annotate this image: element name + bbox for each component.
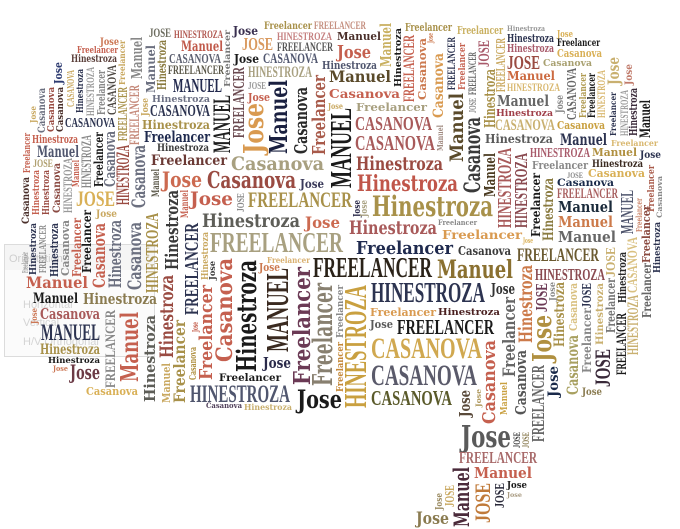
word group: centre: Casanova (291, 87, 312, 154)
word group: centre: FREELANCER (314, 18, 366, 32)
word group: right lobe: Casanova (460, 117, 486, 193)
word group: left lobe: Freelancer (144, 129, 210, 146)
word group: left lobe: HINESTROZA (113, 145, 134, 205)
word group: right lobe: Freelancer (611, 138, 659, 148)
word group: left lobe: Casanova (40, 306, 100, 323)
word group: left lobe: Hinestroza (142, 117, 210, 132)
word group: centre: Casanova (231, 153, 324, 175)
word group: centre: Freelancer (356, 100, 428, 114)
word group: centre: Hinestroza (244, 402, 292, 412)
word group: left lobe: JOSE (33, 156, 53, 170)
word group: left lobe: Hinestroza (162, 190, 183, 270)
word group: left lobe: Casanova (90, 223, 110, 288)
word group: right lobe: Freelancer (608, 91, 618, 136)
word group: right lobe: Jose (604, 57, 623, 86)
word group: right lobe: HINESTROZA (494, 148, 516, 228)
word group: left lobe: Casanova (59, 220, 72, 276)
word group: centre: Casanova (431, 53, 447, 118)
word group: centre: Freelancer (309, 75, 330, 155)
word group: right lobe: Manuel (638, 100, 654, 138)
word group: centre: Jose (360, 200, 370, 218)
word group: left lobe: CASANOVA (65, 116, 116, 131)
word group: centre: Manuel (437, 255, 513, 284)
word group: right lobe: JOSE (468, 98, 479, 113)
word group: right lobe: Jose (547, 282, 557, 302)
word group: centre: Jose (247, 91, 270, 104)
word group: centre: Hinestroza (322, 58, 377, 72)
word group: left lobe: Hinestroza (83, 290, 157, 308)
word group: centre: Manuel (329, 67, 391, 86)
word group: right lobe: Manuel (497, 93, 549, 110)
word group: right lobe: Jose (556, 30, 573, 40)
word group: centre: Freelancer (405, 21, 452, 34)
word group: centre: Casanova (206, 401, 242, 410)
word group: left lobe: HINESTROZA (142, 213, 162, 293)
word group: centre: HINESTROZA (190, 381, 290, 408)
word group: centre: Jose (353, 200, 363, 218)
word group: right lobe: Hinestroza (541, 178, 557, 241)
word group: right lobe: Freelancer (529, 172, 543, 237)
word group: speech bubble tail: Jose (459, 420, 511, 455)
faint background options panel: Horizontal (23, 299, 73, 311)
word group: centre: Hinestroza (438, 308, 500, 318)
word group: left lobe: Manuel (72, 160, 82, 187)
word group: right lobe: Manuel (481, 153, 499, 197)
word group: left lobe: FREELANCER (168, 62, 224, 77)
word group: right lobe: Hinestroza (515, 265, 537, 343)
word group: right lobe: JOSE (507, 52, 540, 74)
word group: centre: JOSE (248, 80, 266, 92)
word group: left lobe: Casanova (52, 163, 63, 213)
word group: right lobe: Hinestroza (653, 222, 663, 273)
word group: centre: Jose (327, 101, 343, 111)
word group: centre: Hinestroza (202, 210, 300, 232)
word group: left lobe: HINESTROZA (83, 67, 97, 116)
word group: centre: Manuel (337, 29, 382, 43)
word group: right lobe: Hinestroza (552, 282, 568, 347)
word group: centre: Manuel (377, 23, 395, 67)
word group: left lobe: Jose (190, 322, 200, 333)
word group: centre: Manuel (446, 93, 468, 162)
word group: centre: CASANOVA (355, 113, 432, 135)
word group: left lobe: Hinestroza (40, 342, 100, 358)
word group: speech bubble tail: Manuel (474, 465, 532, 482)
word group: right lobe: JOSE (604, 247, 619, 277)
word group: centre: Jose (490, 281, 515, 298)
word group: speech bubble tail: FREELANCER (528, 364, 548, 442)
word group: left lobe: Casanova (124, 222, 146, 290)
word group: right lobe: FREELANCER (465, 52, 479, 95)
word group: left lobe: Freelancer (70, 217, 84, 277)
word group: right lobe: CASANOVA (565, 67, 580, 120)
word group: left lobe: FREELANCER (38, 224, 49, 273)
word group: left lobe: CASANOVA (104, 65, 119, 115)
word group: right lobe: Freelancer (532, 159, 588, 172)
word group: right lobe: HINESTROZA (530, 146, 591, 161)
word group: centre: Freelancer (336, 285, 346, 338)
word group: right lobe: JOSE (567, 171, 583, 180)
word group: centre: FREELANCER (277, 39, 333, 54)
word group: speech bubble tail: JOSE (493, 483, 508, 508)
word group: speech bubble tail: Manuel (500, 382, 510, 415)
word group: left lobe: Jose (95, 209, 117, 220)
word group: left lobe: Manuel (33, 291, 78, 307)
word group: speech bubble tail: Jose (474, 388, 483, 408)
word group: right lobe: Casanova (655, 175, 664, 218)
word group: centre (188, 18, 533, 414)
word group: centre: HINESTROZA (337, 285, 373, 408)
word group: centre: Hinestroza (356, 153, 443, 175)
word group: left lobe: FREELANCER (181, 223, 203, 315)
word group: centre: Jose (303, 213, 340, 232)
word group: right lobe: Hinestroza (507, 24, 545, 33)
word group: centre: Hinestroza (357, 171, 458, 197)
word group: right lobe: HINESTROZA (625, 295, 642, 355)
word group: centre: FREELANCER (248, 187, 353, 212)
word group: centre: CASANOVA (263, 51, 318, 67)
word group: left lobe: Freelancer (79, 210, 94, 273)
word group: left lobe: JOSE (76, 186, 115, 211)
word group: right lobe: Freelancer (579, 308, 594, 373)
word group: centre: FREELANCER (210, 228, 344, 259)
word group: centre: FREELANCER (313, 252, 433, 284)
word group: left lobe: Casanova (56, 87, 66, 132)
word group: left lobe: Hinestroza (48, 223, 61, 277)
word group: speech bubble tail: FREELANCER (459, 448, 537, 467)
word group: left lobe: Casanova (21, 177, 32, 224)
word group: left lobe: Manuel (181, 39, 223, 55)
word group: centre: FREELANCER (229, 67, 248, 138)
word group: right lobe: Hinestroza (595, 282, 606, 345)
word group: centre: Jose (232, 23, 258, 38)
word group: left lobe: MANUEL (41, 320, 100, 345)
word group: speech bubble tail: JOSE (521, 432, 531, 448)
word group: centre: Casanova (415, 37, 429, 100)
word group: left lobe: Casanova (37, 88, 48, 133)
word group: right lobe: Jose (624, 64, 635, 86)
word group: left lobe: Hinestroza (201, 232, 211, 280)
word group: left lobe: MANUEL (173, 75, 222, 97)
word group: right lobe: CASANOVA (625, 237, 641, 293)
word group: left lobe: Jose (52, 62, 65, 85)
word group: left lobe: Hinestroza (154, 40, 169, 90)
word group: right lobe: Manuel (560, 130, 607, 149)
word group: centre: Jose (335, 42, 371, 63)
word group: left lobe: Freelancer (117, 39, 127, 85)
word group: left lobe: Jose (99, 37, 119, 48)
word group: right lobe: Jose (639, 150, 661, 161)
word group: left lobe: FREELANCER (127, 85, 143, 145)
word group: right lobe: Freelancer (647, 165, 657, 212)
word group: left lobe: Casanova (128, 145, 150, 208)
word group: left lobe: Manuel (143, 45, 158, 93)
word group: centre: Freelancer (267, 255, 311, 265)
word group: right lobe: Casanova (563, 335, 582, 395)
word group: left lobe: Freelancer (91, 132, 106, 187)
word group: right lobe: Manuel (558, 198, 613, 216)
word group: left lobe: Freelancer (170, 320, 189, 403)
word group: centre: MANUEL (323, 108, 358, 188)
faint background options panel: H/V Orthogonal (23, 336, 99, 348)
word group: centre: JOSE (242, 34, 273, 54)
word group: right lobe: JOSE (590, 349, 615, 387)
word group: right lobe: Hinestroza (507, 32, 554, 45)
word group: left lobe: FREELANCER (116, 87, 131, 141)
word group: left lobe: HINESTROZA (60, 158, 75, 213)
word group: speech bubble tail: Manuel (449, 467, 474, 527)
word group: centre: CASANOVA (355, 131, 436, 155)
word group: right lobe: FREELANCER (557, 186, 618, 202)
word group: centre: Casanova (458, 243, 511, 258)
word group: centre: Manuel (264, 80, 293, 154)
word group: right lobe: Freelancer (457, 24, 503, 37)
word group: centre: Jose (299, 176, 324, 191)
word group: right lobe: Freelancer (500, 296, 520, 377)
word group: right lobe: Freelancer (640, 262, 654, 318)
word group: left lobe: Hinestroza (157, 143, 209, 154)
word group: right lobe: JOSE (532, 283, 551, 312)
word group: left lobe: Casanova (101, 131, 119, 187)
word group: left lobe: Manuel (180, 190, 191, 218)
word group: right lobe: CASANOVA (495, 117, 555, 134)
word group: speech bubble tail: Jose (506, 481, 527, 491)
word group: centre: Jose (295, 385, 342, 414)
word group: left lobe: Manuel (115, 312, 144, 382)
word group: centre: CASANOVA (371, 332, 482, 365)
word group: right lobe (457, 24, 664, 398)
word group: left lobe: CASANOVA (65, 70, 77, 107)
word group: centre: MANUEL (259, 268, 295, 352)
word group: right lobe: Freelancer (579, 73, 589, 118)
word group: right lobe: JOSE (476, 40, 493, 67)
word group: right lobe: HINESTROZA (594, 70, 608, 118)
word group: centre: Casanova (329, 86, 400, 101)
word group: speech bubble tail: Casanova (479, 340, 500, 424)
word group: centre: HINESTROZA (371, 278, 485, 309)
word group: right lobe: HINESTROZA (511, 153, 531, 228)
word group: speech bubble tail: Jose (435, 493, 445, 511)
word group: right lobe: Manuel (507, 68, 555, 83)
word group: centre: Freelancer (264, 21, 313, 32)
word group: centre: Jose (261, 355, 291, 372)
word group: right lobe: Hinestroza (485, 131, 553, 146)
word group: right lobe: Freelancer (557, 38, 601, 49)
word group: centre: Jose (239, 103, 270, 156)
word group: left lobe: FREELANCER (103, 310, 119, 388)
word group: centre: Freelancer (336, 342, 346, 392)
word group: centre: Jose (369, 318, 393, 331)
word group: left lobe: Freelancer (95, 70, 108, 115)
word group: right lobe: Manuel (558, 229, 616, 246)
word group: centre: Jose (522, 236, 533, 245)
word group: centre: Freelancer (308, 283, 339, 386)
word group: right lobe: Casanova (557, 178, 615, 189)
word group: left lobe: Jose (160, 167, 202, 192)
word group: centre: MANUEL (209, 95, 236, 153)
word group: left lobe: Hinestroza (71, 54, 117, 65)
word group: right lobe: Casanova (557, 119, 605, 132)
word group: left lobe: JOSE (149, 25, 171, 40)
word group: right lobe: Casanova (567, 283, 580, 331)
word group: left lobe: Freelancer (23, 133, 33, 173)
word group: right lobe: Hinestroza (507, 42, 554, 55)
word group: right lobe: Casanova (588, 167, 645, 180)
word group: right lobe: HINESTROZA (617, 90, 631, 136)
word group: left lobe: CASANOVA (169, 52, 222, 67)
word group: left lobe: Hinestroza (156, 275, 178, 358)
word group: centre: JOSE (236, 193, 247, 212)
word group: centre: Jose (426, 33, 435, 44)
word group: right lobe: Hinestroza (627, 88, 640, 136)
word group: left lobe: Jose (52, 364, 68, 373)
word group: left lobe: Manuel (151, 169, 162, 197)
faint background options panel (4, 244, 154, 356)
word group: right lobe: FREELANCER (517, 245, 599, 266)
word group: left lobe: Casanova (207, 166, 296, 194)
word group: centre: Jose (188, 188, 233, 210)
word group: left lobe: Hinestroza (48, 355, 100, 365)
word group: right lobe: Hinestroza (496, 109, 553, 119)
word group: speech bubble tail: JOSE (443, 485, 458, 507)
word group: left lobe: Freelancer (196, 285, 217, 380)
word group: left lobe: Hinestroza (29, 223, 39, 275)
word group: left lobe: Casanova (86, 385, 138, 398)
word group: left lobe: Casanova (189, 347, 199, 380)
word group: speech bubble tail: Casanova (513, 349, 530, 415)
word group: speech bubble tail: Jose (414, 509, 449, 529)
word group: centre: Freelancer (438, 218, 477, 227)
word group: left lobe: Hinestroza (76, 69, 86, 113)
word group: left lobe: Freelancer (77, 46, 118, 56)
word group: left lobe: Manuel (37, 142, 79, 161)
word group: centre: Hinestroza (232, 260, 263, 372)
word group: left lobe: Hinestroza (32, 133, 78, 146)
word group: left lobe: Hinestroza (32, 170, 42, 215)
word group: centre: Hinestroza (394, 28, 404, 87)
word group: centre: Freelancer (288, 266, 316, 385)
word group: right lobe: HINESTROZA (507, 80, 560, 94)
word group: left lobe: HINESTROZA (79, 135, 95, 188)
word group: centre: FREELANCER (397, 315, 495, 339)
word group: right lobe: HINESTROZA (535, 265, 605, 284)
word group: left lobe: Jose (207, 261, 217, 281)
word group: left lobe (20, 25, 296, 403)
word group: right lobe: Hinestroza (616, 252, 629, 303)
word group: speech bubble tail (414, 340, 562, 529)
word group: centre: Freelancer (219, 373, 282, 384)
word group: speech bubble tail: JOSE (512, 432, 522, 448)
word group: left lobe: Jose (28, 106, 38, 124)
word group: centre: CASANOVA (371, 386, 453, 410)
word group: left lobe: Jose (69, 360, 100, 384)
word group: right lobe: Freelancer (458, 43, 468, 90)
word group: speech bubble tail: Jose (546, 366, 562, 398)
word group: right lobe: FREELANCER (614, 313, 630, 375)
word group: right lobe: Freelancer (604, 277, 618, 333)
word group: left lobe: Manuel (26, 273, 88, 292)
word group: left lobe: Casanova (212, 258, 238, 362)
word group: right lobe: Casanova (557, 47, 602, 60)
word group: left lobe: Freelancer (151, 153, 228, 169)
word group: right lobe: Freelancer (640, 205, 653, 263)
word group: left lobe: Jose (29, 308, 39, 325)
word group: left lobe: Freelancer (20, 252, 30, 273)
faint background options panel: Orientation (9, 253, 63, 265)
word group: right lobe: Jose (555, 95, 566, 114)
word group: centre: Freelancer (222, 29, 232, 87)
faint background options panel: Vertical (23, 317, 59, 329)
word group: centre: HINESTROZA (277, 29, 332, 43)
word group: centre: Hinestroza (372, 190, 493, 223)
word group: speech bubble tail: Jose (506, 491, 522, 499)
word group: left lobe: Manuel (160, 363, 173, 403)
word group: centre: Hinestroza (349, 217, 437, 239)
word group: centre: FREELANCER (444, 37, 458, 90)
word group: right lobe: Manuel (592, 146, 637, 159)
word group: left lobe: CASANOVA (150, 101, 210, 120)
word group: right lobe: Freelancer (634, 197, 644, 232)
word group: right lobe: Jose (581, 387, 602, 398)
word group: left lobe: Hinestroza (141, 315, 159, 402)
word group: left lobe: Jose (141, 98, 151, 117)
word group: centre: CASANOVA (371, 359, 477, 392)
word group: speech bubble tail: JOSE (470, 483, 495, 523)
word group: right lobe: Manuel (558, 214, 613, 231)
word group: right lobe: Jose (528, 315, 558, 364)
word group: right lobe: Casanova (543, 59, 592, 69)
word group: centre: Jose (258, 261, 280, 274)
word group: centre: Freelancer (442, 227, 522, 242)
word group: centre: Freelancer (356, 238, 453, 259)
word group: left lobe: Manuel (129, 37, 146, 79)
word group: right lobe: Freelancer (587, 72, 598, 118)
word group: left lobe: HINESTROZA (174, 27, 223, 41)
word group: centre: Jose (233, 51, 259, 66)
word group: right lobe: Hinestroza (482, 69, 499, 128)
word group: right lobe: JOSE (580, 283, 595, 308)
word group: centre: HINESTROZA (248, 64, 312, 81)
word group: centre: Freelancer (370, 305, 437, 319)
word group: left lobe: Hinestroza (152, 95, 210, 105)
word group: speech bubble tail: Jose (456, 390, 474, 419)
word group: left lobe: Hinestroza (42, 170, 52, 215)
word group: centre: Manuel (435, 125, 445, 151)
word group: right lobe: MANUEL (617, 190, 637, 234)
word group: left lobe: Casanova (47, 87, 57, 132)
word group: right lobe: Hinestroza (592, 159, 643, 170)
word group: left lobe: Hinestroza (106, 220, 126, 288)
